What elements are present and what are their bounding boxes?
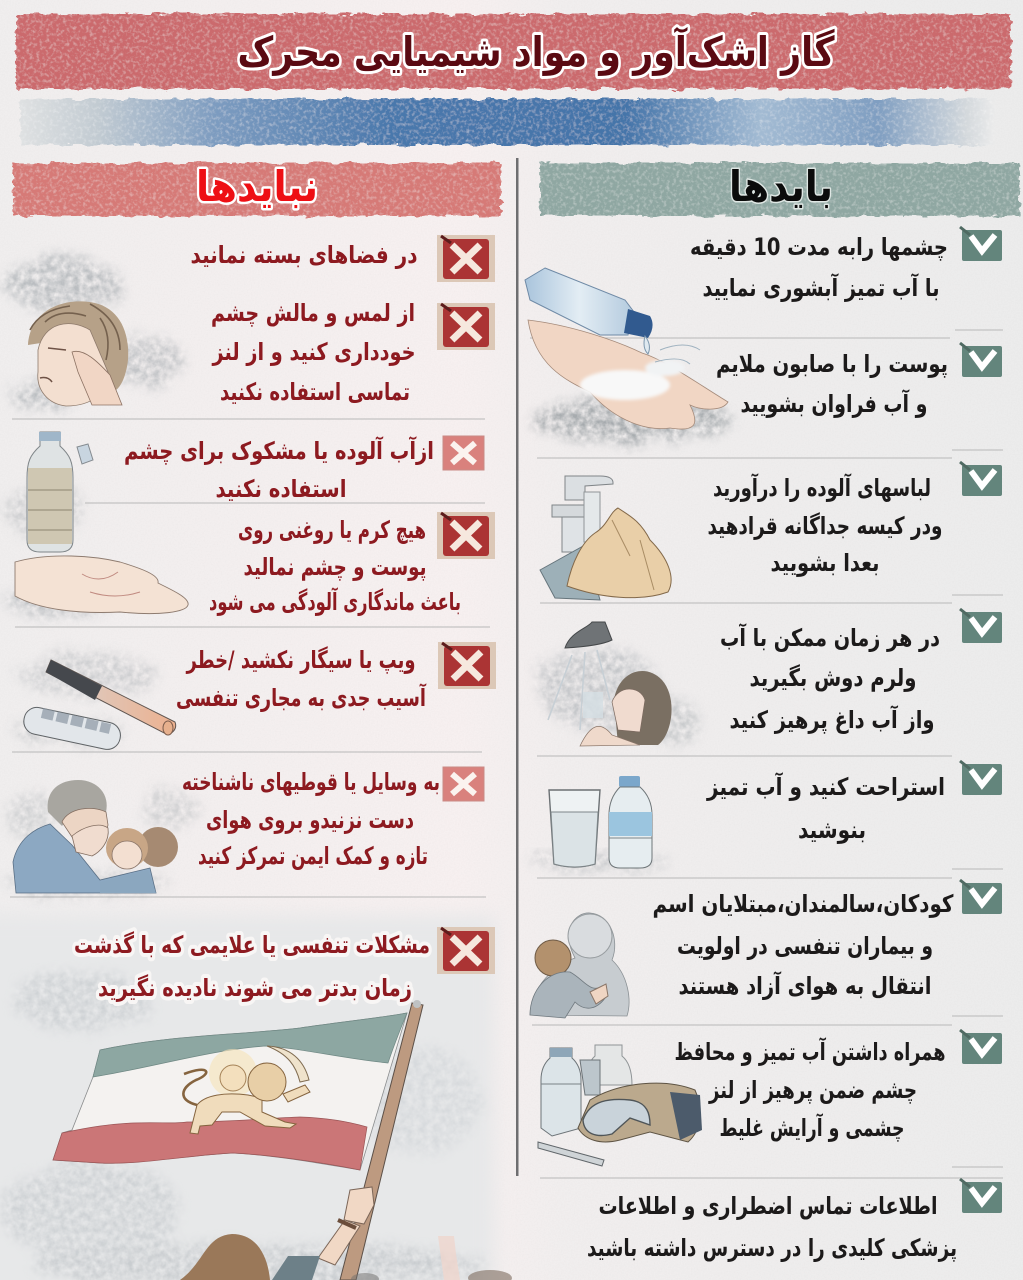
do text block 6: و بیماران تنفسی در اولویت xyxy=(677,932,933,960)
column divider xyxy=(516,158,518,1176)
do text block 2: پوست را با صابون ملایم xyxy=(716,350,948,378)
do text block 5 xyxy=(706,772,945,844)
dont text block 5: آسیب جدی به مجاری تنفسی xyxy=(176,683,427,712)
check icon 3 xyxy=(960,462,1002,496)
dont text block 6 xyxy=(182,768,440,870)
check icon 5 xyxy=(960,761,1002,795)
dont text block 3: ازآب آلوده یا مشکوک برای چشم xyxy=(124,436,434,465)
do text block 8 xyxy=(587,1192,957,1262)
x icon 4 xyxy=(437,512,495,559)
dont text block 4: هیچ کرم یا روغنی روی xyxy=(238,516,426,544)
check icon 7 xyxy=(960,1030,1002,1064)
do text block 8: اطلاعات تماس اضطراری و اطلاعات xyxy=(598,1192,938,1220)
do text block 4: در هر زمان ممکن با آب xyxy=(720,623,940,652)
dont text block 2: خودداری کنید و از لنز xyxy=(212,338,416,366)
dont text block 3: استفاده نکنید xyxy=(216,475,346,503)
do text block 5: استراحت کنید و آب تمیز xyxy=(706,772,945,801)
illustration: man shielding child xyxy=(4,780,200,897)
dont text block 5: ویپ یا سیگار نکشید /خطر xyxy=(186,646,416,674)
lion and sword emblem xyxy=(183,1046,310,1134)
do text block 6 xyxy=(652,890,954,1000)
illustration: shower and woman xyxy=(540,622,698,746)
check icon 4 xyxy=(960,609,1002,643)
illustration: contaminated bottle and hand xyxy=(5,432,188,616)
dont text block 4 xyxy=(209,516,461,616)
x icon 7 xyxy=(437,927,495,974)
dont text block 4: باعث ماندگاری آلودگی می شود xyxy=(209,587,461,616)
do text block 4 xyxy=(720,623,940,734)
x icon 6 xyxy=(443,767,484,801)
lower-left cloudy background xyxy=(0,915,495,1280)
dont text block 2: تماسی استفاده نکنید xyxy=(220,378,410,406)
do text block 1 xyxy=(690,233,948,302)
do text block 6: انتقال به هوای آزاد هستند xyxy=(678,971,932,1000)
dont text block 2 xyxy=(211,299,416,406)
x icon 1 xyxy=(437,235,495,282)
dont text block 3 xyxy=(124,436,434,503)
dont text block 5 xyxy=(176,646,427,712)
dont text block 7: مشکلات تنفسی یا علایمی که با گذشت xyxy=(74,931,430,959)
do text block 2: و آب فراوان بشویید xyxy=(740,389,928,418)
illustration: water poured on hands xyxy=(525,268,730,442)
illustration: faucet and bag of clothes xyxy=(540,476,671,600)
panel: dos header xyxy=(540,162,1020,216)
do text block 7 xyxy=(674,1037,946,1142)
illustration: child rubbing eye xyxy=(7,257,181,411)
do text block 5: بنوشید xyxy=(798,816,866,844)
illustration: iranian lion and sun flag with protester xyxy=(53,1000,512,1280)
do text block 4: واز آب داغ پرهیز کنید xyxy=(730,705,934,734)
illustration: parent carrying child xyxy=(530,913,629,1018)
heading: dos: بایدها xyxy=(729,162,833,211)
dont text block 2: از لمس و مالش چشم xyxy=(211,299,415,327)
do text block 3 xyxy=(708,473,942,577)
blue banner xyxy=(20,99,995,145)
dont text block 7 xyxy=(74,931,430,1002)
do text block 3: ودر کیسه جداگانه قرادهید xyxy=(708,512,942,540)
check icon 2 xyxy=(960,343,1002,377)
dont text block 4: پوست و چشم نمالید xyxy=(244,553,426,581)
do text block 1: با آب تمیز آبشوری نمایید xyxy=(702,273,940,302)
x icon 3 xyxy=(443,436,484,470)
panel: donts header xyxy=(13,162,501,216)
x icon 2 xyxy=(437,303,495,350)
do text block 3: لباسهای آلوده را درآورید xyxy=(713,473,931,502)
do text block 6: کودکان،سالمندان،مبتلایان اسم xyxy=(652,890,954,918)
x icon 5 xyxy=(438,642,496,689)
do text block 2 xyxy=(716,350,948,418)
illustration: vape and cigarette xyxy=(15,653,176,752)
check icon 8 xyxy=(960,1179,1002,1213)
illustration: glass and water bottle xyxy=(530,776,670,871)
dont text block 1: در فضاهای بسته نمانید xyxy=(190,241,418,269)
dont text block 6: دست نزنیدو بروی هوای xyxy=(206,806,414,834)
heading: donts: نبایدها xyxy=(196,162,318,211)
do text block 7: چشمی و آرایش غلیط xyxy=(720,1113,904,1142)
dont text block 6: به وسایل یا قوطیهای ناشناخته xyxy=(182,768,440,796)
dont text block 7: زمان بدتر می شوند نادیده نگیرید xyxy=(98,974,412,1002)
dont text block 6: تازه و کمک ایمن تمرکز کنید xyxy=(198,842,428,870)
illustration: bottles, goggles and tube xyxy=(538,1045,702,1166)
panel: title banner xyxy=(16,14,1011,89)
do text block 1: چشمها رابه مدت 10 دقیقه xyxy=(690,233,948,261)
do text block 7: چشم ضمن پرهیز از لنز xyxy=(708,1076,917,1104)
check icon 6 xyxy=(960,880,1002,914)
title: گاز اشک‌آور و مواد شیمیایی محرک xyxy=(238,27,835,77)
do text block 3: بعدا بشویید xyxy=(770,549,880,577)
do text block 4: ولرم دوش بگیرید xyxy=(750,664,916,692)
check icon 1 xyxy=(960,227,1002,261)
